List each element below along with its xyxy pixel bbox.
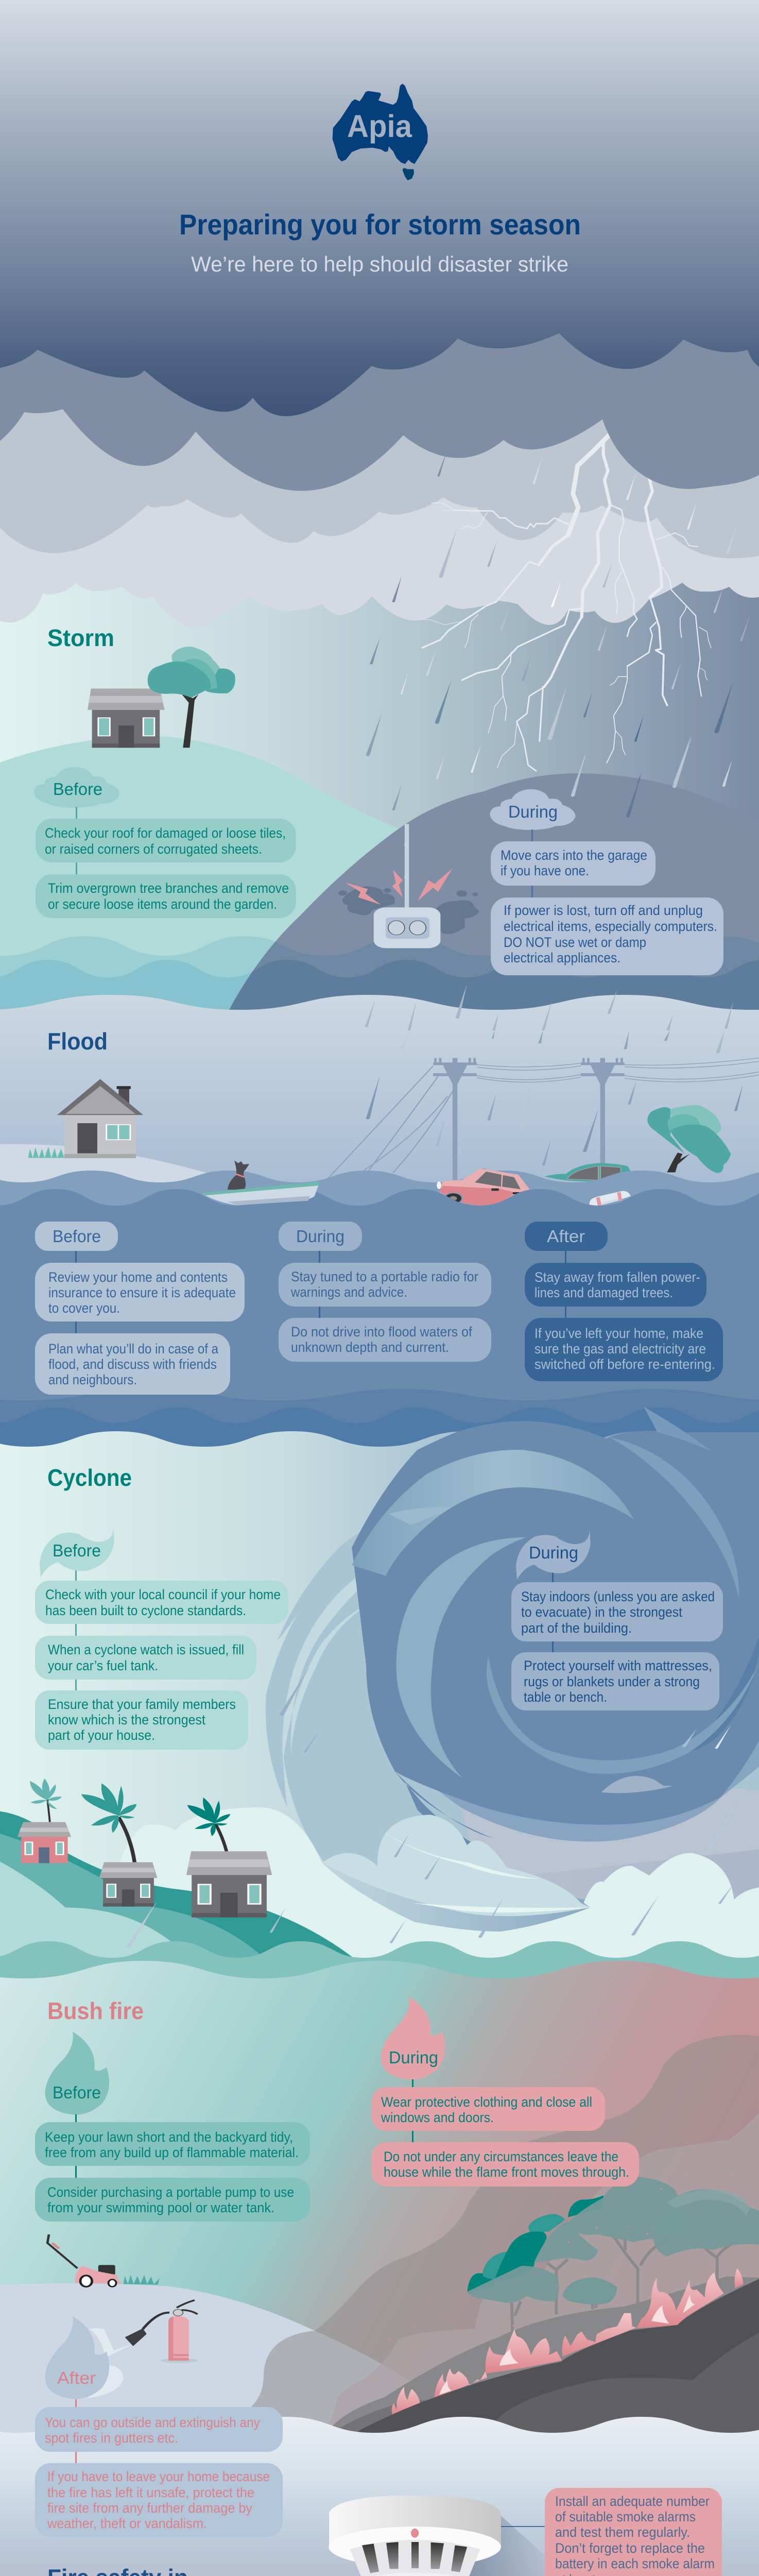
text box: smoke alarms	[545, 2488, 722, 2576]
icon: tree	[148, 647, 235, 748]
tag: flood before	[35, 1222, 118, 1251]
wave A	[0, 1171, 759, 1236]
wave band between cyclone and fire	[0, 1941, 759, 2009]
waves: right blue	[230, 936, 759, 1010]
tag: cyclone before	[40, 1527, 114, 1577]
text box: review insurance	[35, 1263, 245, 1321]
text box: trim trees: Trim overgrown tree branches and remove	[48, 880, 289, 896]
lightning bolts	[420, 433, 711, 771]
tag icon: flame during	[381, 1996, 445, 2080]
tag: flood during: During	[296, 1227, 344, 1246]
hill: before side	[0, 737, 515, 1030]
icon: wind-blown tree	[647, 1105, 731, 1173]
text box: review insurance: Review your home and contents	[48, 1269, 228, 1285]
text box: stay away	[525, 1263, 706, 1307]
rain: flood	[366, 1030, 743, 1165]
text box: check roof: or raised corners of corrugated sheets.	[45, 841, 262, 857]
text box: local council: Check with your local council if your home	[45, 1587, 281, 1602]
text box: stay away: lines and damaged trees.	[534, 1285, 673, 1300]
text box: leave home: weather, theft or vandalism.	[47, 2516, 207, 2531]
text box: stay away: Stay away from fallen power-	[534, 1269, 700, 1285]
illustration: cyclone clouds	[2, 1807, 759, 1960]
text box: do not leave	[371, 2142, 639, 2187]
wave D	[0, 1408, 759, 1458]
logo: Apia Australia map: Apia	[347, 109, 412, 144]
heading: Cyclone: Cyclone	[47, 1464, 132, 1491]
text box: move cars: if you have one.	[501, 863, 589, 878]
icon: pink house with palm	[18, 1778, 71, 1863]
text box: power lost: electrical appliances.	[504, 950, 620, 965]
panel: bush fire text	[35, 1997, 639, 2537]
panel: cyclone text	[35, 1464, 723, 1750]
text box: review insurance: insurance to ensure it is adequate	[48, 1285, 236, 1300]
text box: plan	[35, 1333, 230, 1395]
text box: review insurance: to cover you.	[48, 1300, 120, 1316]
icon: sparking power outlet	[338, 824, 479, 948]
tag: Before cloud: Before	[53, 779, 102, 799]
text box: strongest part: know which is the strongest	[48, 1712, 205, 1727]
text box: leave home	[35, 2463, 283, 2537]
text box: protective clothing: Wear protective clothing and close all	[381, 2094, 592, 2110]
text box: trim trees	[36, 874, 296, 918]
cloud layer: palest	[0, 0, 759, 628]
icon: large house with palm	[186, 1798, 272, 1918]
tag: flood during	[279, 1222, 362, 1251]
tag: During cloud	[490, 789, 576, 830]
wave B	[0, 1189, 759, 1458]
text box: radio: Stay tuned to a portable radio for	[291, 1269, 478, 1284]
illustration: cyclone spiral	[266, 1406, 759, 1934]
trees burning	[468, 2176, 759, 2332]
text box: lawn: Keep your lawn short and the backyard tidy,	[45, 2129, 293, 2145]
text box: power lost: If power is lost, turn off and unplug	[504, 903, 703, 918]
icon: grey house	[88, 688, 165, 748]
text box: radio: warnings and advice.	[290, 1284, 407, 1300]
rain: storm sky	[401, 451, 750, 784]
text box: local council: has been built to cyclone standards.	[45, 1603, 246, 1618]
label: fire during: During	[389, 2048, 438, 2067]
tag icon: flame before	[45, 2032, 109, 2115]
tag: flood after: After	[547, 1227, 585, 1246]
text box: fuel tank: When a cyclone watch is issued, fill	[48, 1642, 244, 1657]
text box: protective clothing: windows and doors.	[381, 2110, 494, 2125]
power poles and wires	[328, 1058, 759, 1180]
text box: mattresses	[511, 1652, 719, 1710]
embers	[378, 2173, 732, 2379]
icon: extinguisher with spray	[87, 2300, 198, 2398]
text box: power lost	[491, 897, 723, 975]
panel: fire safety in your home background	[0, 2417, 759, 2576]
text box: left your home: sure the gas and electricity are	[534, 1341, 706, 1357]
text box: plan: flood, and discuss with friends	[48, 1357, 217, 1372]
text box: strongest part	[35, 1690, 248, 1750]
tag: cyclone before: Before	[53, 1541, 101, 1560]
text box: local council	[35, 1581, 288, 1624]
heading: Flood: Flood	[47, 1028, 108, 1055]
tag icon: flame after	[45, 2316, 109, 2399]
text box: move cars: Move cars into the garage	[501, 848, 647, 863]
text box: stay indoors: Stay indoors (unless you are asked	[521, 1589, 715, 1604]
panel: cyclone background	[0, 1431, 759, 1968]
rain: storm lower	[365, 575, 733, 1030]
text box: move cars	[491, 841, 656, 886]
icon: lawn mower	[47, 2234, 160, 2286]
icon: teal car	[544, 1163, 631, 1181]
text box: leave home: the fire has left it unsafe, protect the	[47, 2485, 254, 2500]
flames	[392, 2268, 743, 2415]
flood section background	[0, 995, 759, 1195]
tag: During cloud: During	[508, 802, 558, 821]
tag: Before cloud	[34, 767, 119, 808]
text box: smoke alarms: of suitable smoke alarms	[555, 2509, 696, 2524]
text box: pump: from your swimming pool or water tank.	[47, 2200, 274, 2215]
heading: Storm: Storm	[47, 624, 114, 651]
panel: flood illustration	[0, 1030, 759, 1458]
text box: fuel tank: your car’s fuel tank.	[48, 1658, 158, 1673]
text box: do not drive: unknown depth and current.	[291, 1340, 449, 1355]
text box: left your home	[525, 1318, 723, 1381]
icon: pink car and life buoy	[437, 1168, 631, 1206]
text box: pump	[35, 2178, 310, 2222]
text box: lawn: free from any build up of flammable material.	[45, 2145, 299, 2160]
text box: smoke alarms: and test them regularly.	[555, 2524, 690, 2540]
panel: storm section background	[0, 567, 759, 1030]
text box: pump: Consider purchasing a portable pump to use	[47, 2184, 294, 2200]
illustration: cyclone houses on hill	[0, 1666, 748, 1958]
panel: flood text	[35, 1028, 723, 1395]
text box: smoke alarms: battery in each smoke alarm	[555, 2556, 715, 2571]
tag: flood before: Before	[53, 1227, 101, 1246]
flood hill and house	[0, 1079, 222, 1199]
text box: mattresses: table or bench.	[524, 1689, 607, 1705]
logo: Apia Australia map	[333, 83, 428, 180]
text box: do not drive: Do not drive into flood waters of	[291, 1324, 472, 1340]
text box: lawn	[35, 2122, 310, 2166]
subtitle: We’re here to help should disaster strike	[191, 252, 568, 276]
text box: stay indoors: to evacuate) in the strongest	[521, 1604, 682, 1620]
text box: mattresses: rugs or blankets under a strong	[524, 1674, 700, 1689]
storm illustrations: house, tree, outlet	[88, 647, 479, 948]
text box: check roof	[36, 819, 296, 862]
text box: smoke alarms: Install an adequate number	[555, 2494, 710, 2509]
text box: spot fires	[35, 2407, 283, 2452]
text box: plan: Plan what you’ll do in case of a	[48, 1341, 219, 1357]
text box: power lost: electrical items, especially computers.	[504, 919, 717, 934]
text box: trim trees: or secure loose items around the garden.	[48, 896, 277, 912]
text box: do not drive	[279, 1318, 491, 1362]
text box: spot fires: spot fires in gutters etc.	[45, 2430, 178, 2446]
text box: do not leave: Do not under any circumstances leave the	[384, 2149, 618, 2164]
tag: cyclone during: During	[529, 1543, 578, 1562]
rain: cyclone	[126, 1666, 748, 1948]
panel: storm text	[34, 624, 723, 975]
text box: strongest part: part of your house.	[48, 1727, 155, 1743]
text box: power lost: DO NOT use wet or damp	[504, 935, 646, 950]
cloud layer: mid blue	[0, 0, 759, 491]
text box: left your home: switched off before re-entering.	[534, 1357, 715, 1372]
text box: fuel tank	[35, 1636, 256, 1680]
title: Preparing you for storm season	[179, 208, 581, 241]
text box: stay indoors: part of the building.	[521, 1620, 632, 1636]
icon: smoke alarm	[329, 2495, 545, 2576]
illustration: burning hillside	[330, 2173, 759, 2442]
waves: left teal	[0, 936, 759, 1030]
label: fire before: Before	[53, 2083, 101, 2102]
text box: radio	[279, 1263, 491, 1307]
text box: leave home: If you have to leave your home because	[47, 2469, 270, 2484]
illustration: home clouds and icons	[0, 2495, 759, 2576]
hill: during side	[230, 773, 759, 1030]
tag: cyclone during	[516, 1529, 591, 1580]
panel: fire safety text	[47, 2488, 722, 2576]
icon: dog on boat	[202, 1161, 319, 1205]
text box: left your home: If you’ve left your home, make	[534, 1326, 703, 1341]
icon: grey house with palm	[81, 1783, 158, 1907]
wave C	[0, 1389, 759, 1458]
cloud layer: light	[0, 0, 759, 558]
heading: Bush fire: Bush fire	[47, 1997, 144, 2024]
text box: protective clothing	[371, 2087, 605, 2131]
text box: check roof: Check your roof for damaged or loose tiles,	[45, 825, 286, 841]
tag: flood after	[525, 1222, 608, 1251]
illustration: bush fire hill and smoke	[0, 2035, 759, 2451]
panel: header sky	[0, 0, 759, 416]
text box: strongest part: Ensure that your family members	[48, 1697, 236, 1712]
text box: spot fires: You can go outside and extinguish any	[45, 2415, 260, 2430]
text box: mattresses: Protect yourself with mattresses,	[524, 1658, 712, 1673]
panel: bush fire background	[0, 1961, 759, 2473]
icons: bush fire mower and extinguisher	[45, 1996, 445, 2399]
text box: do not leave: house while the flame front moves through.	[384, 2164, 629, 2180]
text box: stay indoors	[511, 1582, 723, 1641]
label: fire after: After	[57, 2368, 96, 2387]
text box: smoke alarms: Don’t forget to replace the	[555, 2540, 705, 2556]
text box: plan: and neighbours.	[48, 1372, 137, 1387]
text box: leave home: fire site from any further damage by	[47, 2500, 252, 2516]
